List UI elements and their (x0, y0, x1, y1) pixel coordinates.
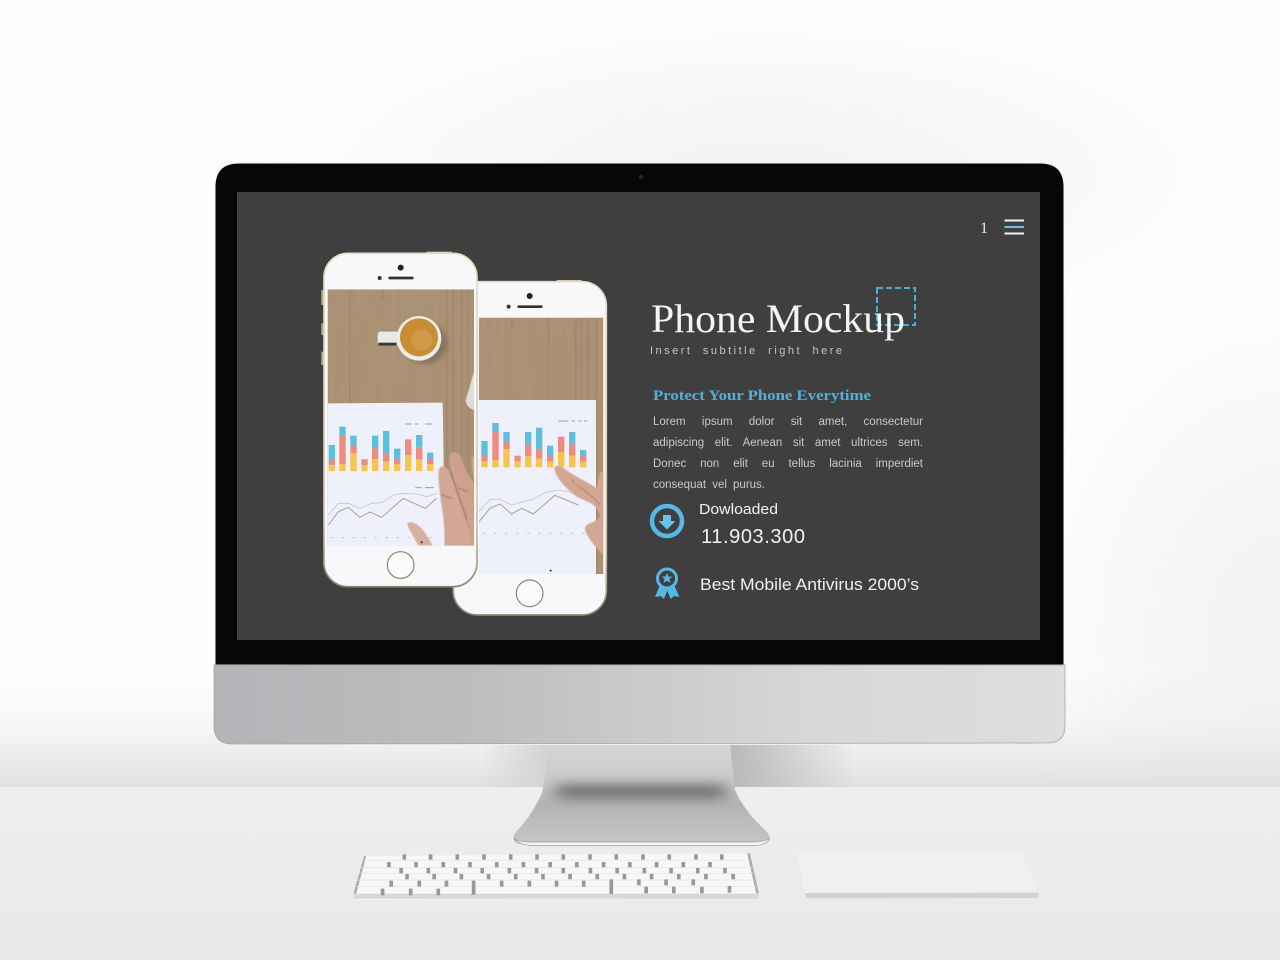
award label: Best Mobile Antivirus 2000’s (700, 575, 919, 594)
monitor shadows on wall (480, 745, 855, 787)
icon: download (652, 506, 682, 536)
body paragraph: Donec non elit eu tellus lacinia imperdiet (653, 458, 923, 470)
section heading: Protect Your Phone Everytime (653, 388, 871, 404)
body paragraph (653, 416, 923, 491)
subtitle: Insert subtitle right here (650, 345, 842, 357)
body paragraph: adipiscing elit. Aenean sit amet ultrices sem. (653, 437, 923, 449)
phone: right (453, 280, 606, 615)
keyboard (354, 853, 759, 900)
body paragraph: Lorem ipsum dolor sit amet, consectetur (653, 416, 923, 428)
icon: hamburger menu (1004, 220, 1024, 234)
phone: left (321, 252, 477, 587)
monitor (214, 163, 1065, 744)
downloaded label: Dowloaded (699, 501, 778, 518)
screen (237, 192, 1040, 640)
webcam (638, 174, 644, 180)
monitor stand (513, 745, 770, 846)
left and right phone mockups (321, 252, 606, 615)
downloaded count: 11.903.300 (701, 526, 805, 548)
monitor chin (214, 665, 1065, 744)
trackpad (797, 852, 1038, 898)
monitor bezel (215, 163, 1064, 665)
page number: 1 (980, 220, 988, 237)
decorative dashed square (877, 288, 915, 325)
body paragraph: consequat vel purus. (653, 479, 765, 491)
icon: award ribbon (655, 569, 680, 599)
title: Phone Mockup (651, 296, 905, 341)
